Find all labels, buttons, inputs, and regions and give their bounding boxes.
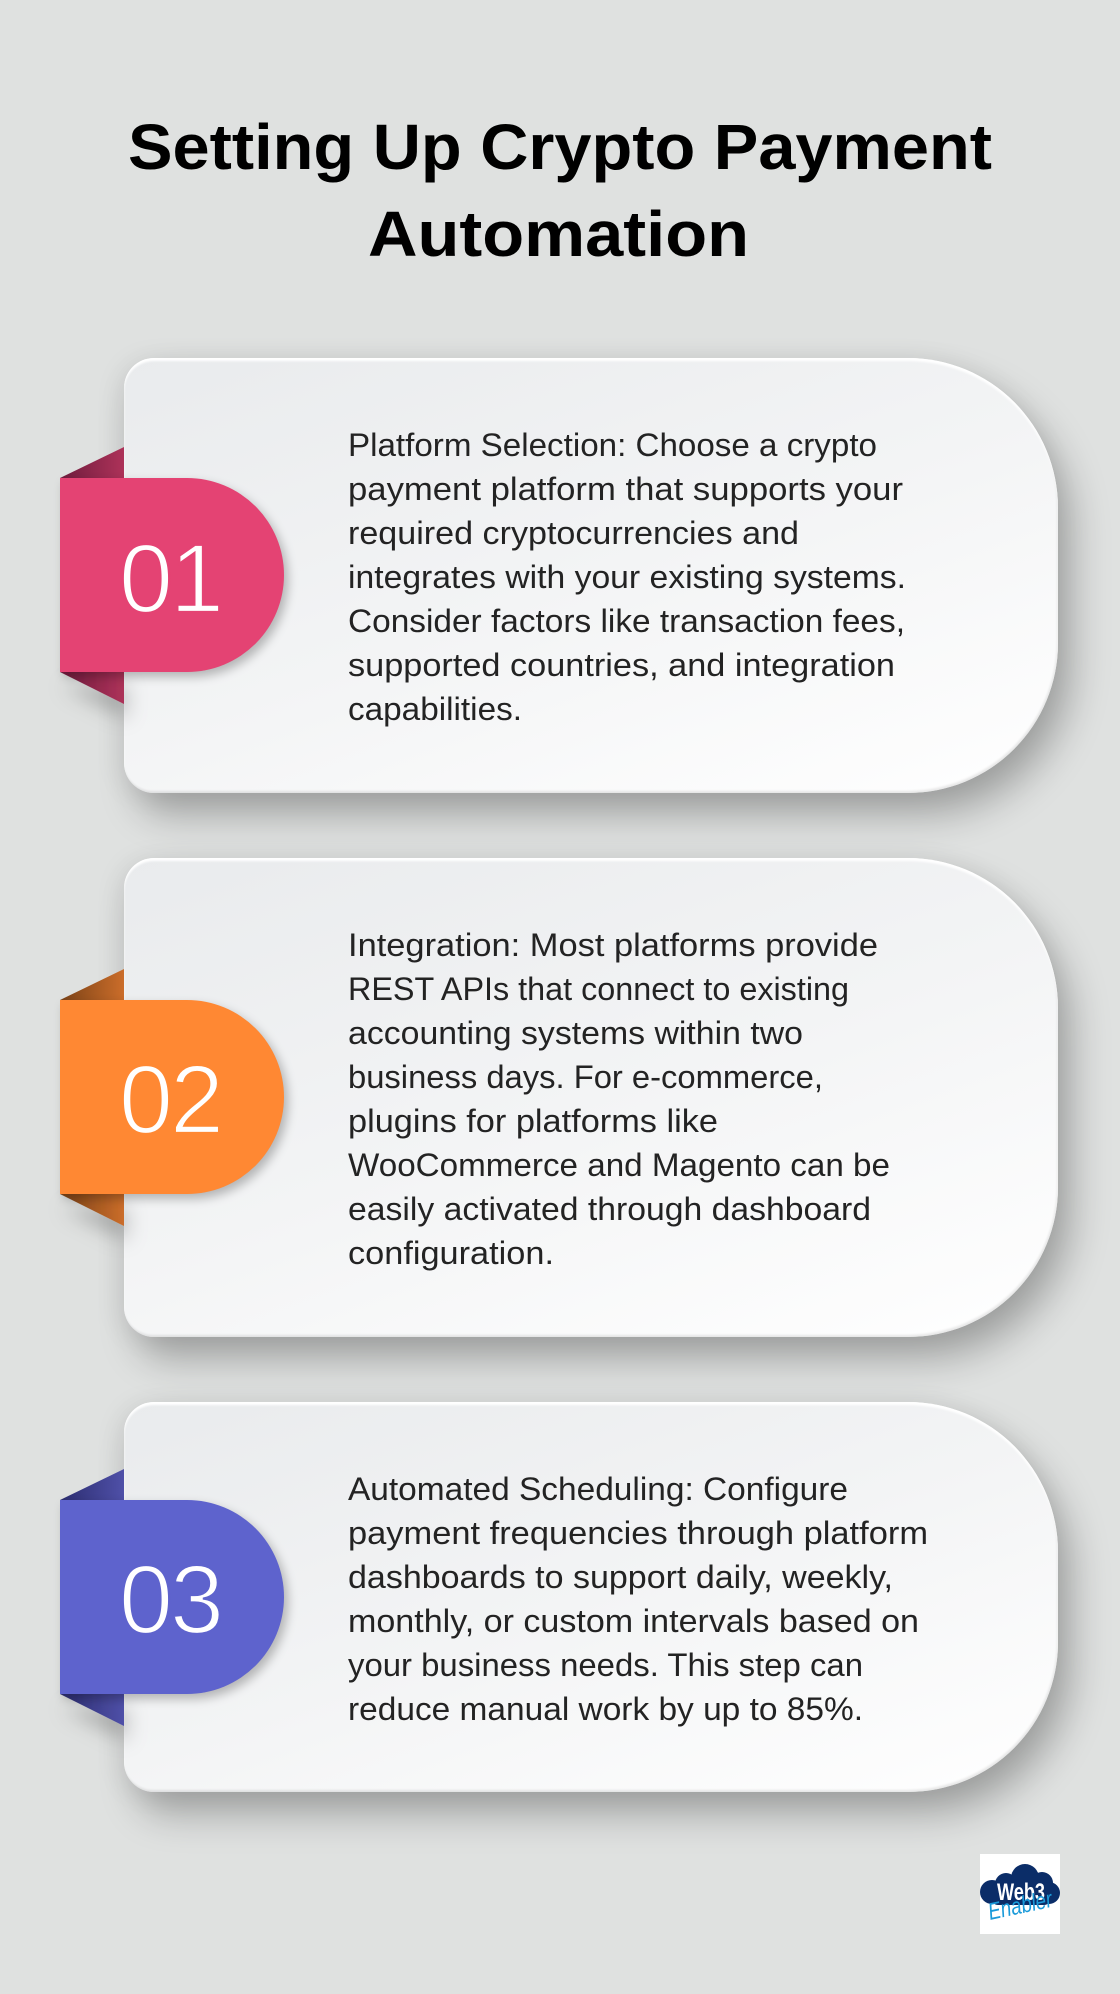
number 03: 03: [119, 1545, 224, 1654]
number badge 02: [60, 1000, 284, 1194]
panel: step 2 integration: Integration: Most platforms provide: [348, 927, 878, 963]
body text: payment frequencies through platform: [348, 1515, 928, 1551]
body text: monthly, or custom intervals based on: [348, 1603, 919, 1639]
number badge 03: [60, 1500, 284, 1694]
body text: Consider factors like transaction fees,: [348, 603, 905, 639]
body text: capabilities.: [348, 691, 522, 727]
ribbon folds: [60, 969, 136, 1244]
logo: Web3 Enabler: [980, 1854, 1060, 1934]
body text: plugins for platforms like: [348, 1103, 718, 1139]
body text: payment platform that supports your: [348, 471, 903, 507]
panel: step 3 automated scheduling: [58, 1396, 1092, 1834]
number 02: 02: [119, 1045, 224, 1154]
body text: [348, 1471, 928, 1727]
card background: [124, 358, 1058, 793]
body text: reduce manual work by up to 85%.: [348, 1691, 863, 1727]
title: Automation: [368, 198, 749, 270]
logo: Web3 Enabler: Web3: [997, 1879, 1045, 1906]
body text: easily activated through dashboard: [348, 1191, 871, 1227]
body text: supported countries, and integration: [348, 647, 895, 683]
body text: configuration.: [348, 1235, 554, 1271]
body text: [348, 927, 890, 1271]
body text: [348, 427, 906, 727]
card background: [124, 1402, 1058, 1792]
body text: required cryptocurrencies and: [348, 515, 799, 551]
body text: accounting systems within two: [348, 1015, 803, 1051]
body text: REST APIs that connect to existing: [348, 971, 849, 1007]
body text: business days. For e-commerce,: [348, 1059, 823, 1095]
panel: step 1 platform selection: [58, 352, 1092, 834]
body text: dashboards to support daily, weekly,: [348, 1559, 893, 1595]
body text: your business needs. This step can: [348, 1647, 863, 1683]
ribbon folds: [60, 1469, 136, 1744]
title: [128, 111, 992, 270]
title: Setting Up Crypto Payment: [128, 111, 992, 183]
panel: step 2 integration: [58, 852, 1092, 1378]
ribbon folds: [60, 447, 136, 722]
panel: step 1 platform selection: Platform Selection: Choose a crypto: [348, 427, 877, 463]
body text: integrates with your existing systems.: [348, 559, 906, 595]
body text: WooCommerce and Magento can be: [348, 1147, 890, 1183]
number 01: 01: [119, 524, 224, 633]
card background: [124, 858, 1058, 1337]
logo: Web3 Enabler: Enabler: [986, 1886, 1056, 1926]
number badge 01: [60, 478, 284, 672]
panel: step 3 automated scheduling: Automated Scheduling: Configure: [348, 1471, 848, 1507]
